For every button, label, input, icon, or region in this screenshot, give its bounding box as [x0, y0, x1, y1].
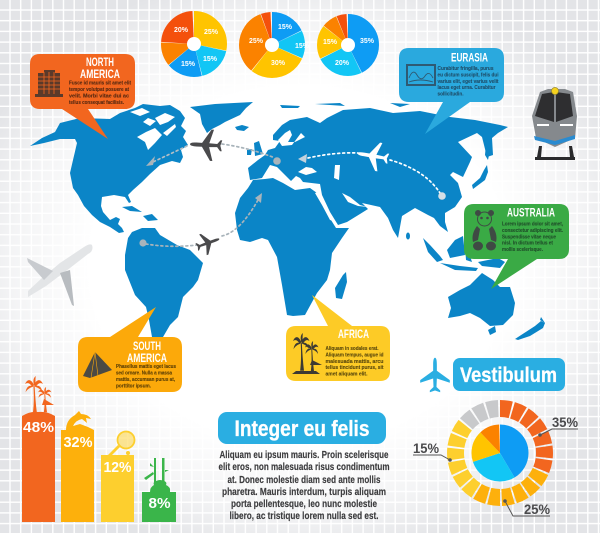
- callout: eurasia: [399, 48, 504, 134]
- seas: [130, 108, 368, 221]
- callout: eurasia: sollicitudin.: [438, 92, 464, 98]
- body text: libero, ac tristique lorem nulla sed est.: [230, 510, 379, 522]
- callout: north america: [30, 54, 135, 139]
- eurasia: [248, 108, 508, 238]
- callout: australia: Suspendisse vitae neque: [502, 234, 557, 240]
- bar chart: 32%: [64, 434, 92, 451]
- top pie chart 3: [323, 30, 375, 67]
- callout: south america: Phasellus mattis eget lacus: [116, 364, 176, 370]
- bar chart: 48%: [23, 419, 54, 436]
- callout: africa: tellus tincidunt purus, sit: [326, 365, 384, 371]
- japan: [472, 165, 488, 189]
- top pie chart 3: 20%: [335, 60, 350, 67]
- callout: australia: AUSTRALIA: [507, 206, 555, 220]
- callout: north america: Fusce id mauris sit amet elit: [69, 80, 131, 86]
- callout: north america: tellus consequat facilisis.: [69, 100, 124, 106]
- bar chart: [22, 376, 176, 522]
- bar: 48%: [22, 376, 55, 522]
- callout: eurasia: Curabitur fringilla, purus: [438, 66, 494, 72]
- callout: south america: SOUTH: [133, 339, 161, 353]
- segmented ring: [456, 408, 544, 498]
- donut chart: 15%: [413, 440, 440, 456]
- callout: south america: mattis, accumsan purus at,: [116, 377, 175, 383]
- icon: palm trees: [292, 333, 322, 374]
- callout: australia: consectetur adipiscing elit.: [502, 228, 563, 234]
- callout: australia: [464, 204, 569, 289]
- body text: pharetra. Mauris interdum, turpis aliquam: [222, 486, 386, 498]
- world map: [30, 102, 545, 340]
- callout: eurasia: eu dictum suscipit, felis dui: [438, 72, 499, 78]
- bar chart: 12%: [104, 459, 132, 476]
- icon: panda: [472, 210, 496, 250]
- callout: australia: nisl. In dictum tellus et: [502, 241, 553, 247]
- callout: africa: [286, 295, 390, 381]
- australia: [448, 273, 515, 326]
- callout: south america: sed ornare. Nulla a massa: [116, 370, 173, 376]
- leader lines and labels: [413, 429, 578, 516]
- icon: building: [35, 70, 63, 97]
- callout: australia: mollis scelerisque.: [502, 247, 543, 253]
- icon: tent: [83, 352, 112, 378]
- top pie chart 1: 15%: [181, 61, 196, 68]
- callout: africa: Aliquam in sodales erat.: [326, 346, 379, 352]
- top pie chart 1: [174, 27, 219, 68]
- callout: australia: Lorem ipsum dolor sit amet,: [502, 222, 563, 228]
- top pie chart 2: 30%: [271, 60, 286, 67]
- top pie chart 2: 25%: [249, 38, 264, 45]
- iceland: [235, 125, 249, 131]
- callout: eurasia: lacus eget urna. Curabitur: [438, 85, 496, 91]
- donut chart: [413, 408, 579, 517]
- heading: vestibulum: Vestibulum: [460, 364, 557, 387]
- uk and ireland: [247, 141, 263, 156]
- sri lanka: [406, 232, 410, 240]
- plane: white over asia: [355, 139, 391, 173]
- route endpoints: [139, 154, 446, 247]
- north america: [30, 104, 188, 233]
- callout: eurasia: varius elit, eget varius velit: [438, 79, 499, 85]
- callout: north america: tempor volutpat posuere at: [69, 87, 129, 93]
- heading: integer eu felis: Integer eu felis: [234, 416, 370, 441]
- top pie chart 1: 25%: [204, 29, 219, 36]
- callout: south america: porttitor ipsum.: [116, 384, 151, 390]
- top pie chart 2: 15%: [278, 24, 293, 31]
- callout: africa: amet aliquam elit.: [326, 372, 368, 378]
- top pie chart 2: [249, 24, 310, 67]
- sakhalin: [485, 144, 490, 160]
- bar chart: 8%: [148, 495, 170, 512]
- callout: north america: velit. Morbi vitae dui ac: [69, 94, 130, 100]
- icon: train: [532, 88, 577, 160]
- heading: vestibulum: [453, 358, 565, 391]
- icon: palm trees orange: [25, 376, 54, 414]
- heading: integer eu felis: [218, 412, 386, 444]
- inner pie: [486, 439, 514, 467]
- top pie chart 3: 15%: [323, 39, 338, 46]
- body text: at. Donec molestie diam sed ante mollis: [228, 474, 381, 486]
- plane: large grey-white at left: [27, 244, 92, 306]
- body text: porta pellentesque, leo nunc molestie: [231, 498, 377, 510]
- bar: 8%: [142, 458, 176, 522]
- body text: [218, 449, 390, 522]
- south america: [125, 228, 203, 337]
- callout: north america: AMERICA: [80, 67, 120, 81]
- callout: africa: malesuada mattis, arcu: [326, 359, 384, 365]
- plane: dark over south atlantic: [193, 229, 223, 257]
- donut chart: 35%: [552, 414, 579, 430]
- callout: eurasia: EURASIA: [451, 51, 488, 65]
- callout: south america: AMERICA: [127, 351, 167, 365]
- top pie chart 2: 15%: [295, 43, 310, 50]
- tasmania and new zealand: [488, 317, 545, 340]
- icon: blue plane: [420, 358, 450, 392]
- callout: south america: [78, 307, 182, 392]
- callout: north america: NORTH: [86, 55, 114, 69]
- donut chart: 25%: [524, 501, 551, 517]
- icon: framed landscape: [407, 65, 435, 85]
- bar: 32%: [61, 411, 94, 522]
- bar: 12%: [101, 432, 134, 522]
- plane: dark over atlantic north: [189, 129, 223, 161]
- top pie chart 1: 15%: [203, 56, 218, 63]
- top pie chart 1: 20%: [174, 27, 189, 34]
- top pie chart 3: 35%: [360, 38, 375, 45]
- madagascar: [335, 272, 347, 299]
- indonesia and se asia: [423, 236, 505, 271]
- greenland: [190, 102, 253, 133]
- caribbean islands: [122, 206, 158, 221]
- callout: africa: Aliquam tempus, augue id: [326, 352, 384, 358]
- body text: Aliquam eu ipsum mauris. Proin scelerisque: [220, 449, 389, 461]
- arctic ocean islands: [280, 103, 410, 108]
- africa: [235, 178, 349, 316]
- callout: africa: AFRICA: [338, 327, 369, 341]
- body text: elit eros, non malesuada risus condimentum: [218, 461, 390, 473]
- dotted routes: [146, 144, 440, 246]
